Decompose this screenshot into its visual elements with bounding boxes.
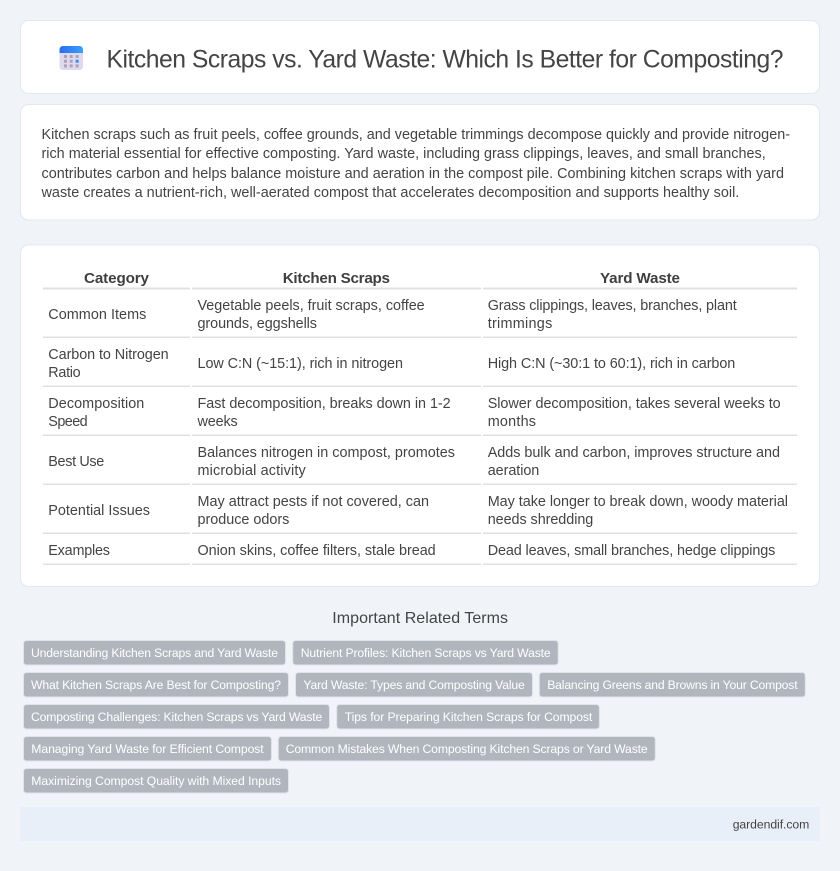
row: decomposition speed: Decomposition: [48, 396, 144, 412]
tag: Nutrient Profiles: Kitchen Scraps vs Yard Waste: [301, 646, 551, 660]
table header row: Yard Waste: [600, 270, 680, 287]
footer bar: [20, 807, 820, 841]
row: best use: Adds bulk and carbon, improves structure and: [488, 445, 780, 461]
row: potential issues: needs shredding: [488, 512, 593, 528]
tag: [278, 736, 655, 761]
tag: [293, 640, 558, 665]
intro paragraph: waste creates a nutrient-rich, well-aerated compost that accelerates decomposition and supports healthy soil.: [40, 185, 739, 201]
row: carbon to nitrogen ratio: Ratio: [48, 365, 81, 381]
row: carbon to nitrogen ratio: [43, 347, 797, 387]
header panel: [20, 20, 820, 94]
tag: Composting Challenges: Kitchen Scraps vs Yard Waste: [31, 710, 323, 724]
row: potential issues: May take longer to break down, woody material: [488, 494, 788, 510]
tag: Maximizing Compost Quality with Mixed Inputs: [31, 774, 281, 788]
row: potential issues: May attract pests if not covered, can: [198, 494, 429, 510]
row: decomposition speed: weeks: [196, 414, 238, 430]
row: decomposition speed: Fast decomposition, breaks down in 1-2: [198, 396, 451, 412]
row: potential issues: Potential Issues: [48, 503, 150, 519]
row: carbon to nitrogen ratio: Carbon to Nitrogen: [48, 347, 169, 363]
tag: Tips for Preparing Kitchen Scraps for Compost: [345, 710, 593, 724]
table header row: Category: [84, 270, 150, 287]
row: decomposition speed: [43, 396, 797, 436]
title: Kitchen Scraps vs. Yard Waste: Which Is Better for Composting?: [106, 46, 784, 74]
intro paragraph: [40, 127, 790, 201]
row: examples: [43, 543, 797, 565]
row: examples: Dead leaves, small branches, hedge clippings: [488, 543, 775, 559]
icon: calendar: [60, 46, 83, 70]
row: carbon to nitrogen ratio: Low C:N (~15:1), rich in nitrogen: [198, 356, 403, 372]
panel: introduction: [20, 104, 820, 220]
row: common items: trimmings: [488, 316, 552, 332]
row: decomposition speed: Speed: [48, 414, 88, 430]
row: carbon to nitrogen ratio: High C:N (~30:1 to 60:1), rich in carbon: [488, 356, 735, 372]
table header row: [43, 270, 797, 290]
tag: [337, 704, 599, 729]
tag: [24, 704, 330, 729]
tag: Common Mistakes When Composting Kitchen Scraps or Yard Waste: [286, 742, 648, 756]
intro paragraph: rich material essential for effective composting. Yard waste, including grass clippings, leaves, and small branches,: [42, 146, 766, 162]
row: best use: aeration: [488, 463, 539, 479]
tag: [24, 672, 288, 697]
table header row: Kitchen Scraps: [283, 270, 390, 287]
tag: Balancing Greens and Browns in Your Compost: [547, 678, 798, 692]
heading: important related terms: Important Related Terms: [332, 610, 508, 627]
intro paragraph: contributes carbon and helps balance moisture and aeration in the compost pile. Combining kitchen scraps with yard: [42, 166, 784, 182]
row: decomposition speed: months: [488, 414, 536, 430]
tag: Understanding Kitchen Scraps and Yard Waste: [31, 646, 278, 660]
row: best use: Balances nitrogen in compost, promotes: [198, 445, 455, 461]
row: decomposition speed: Slower decomposition, takes several weeks to: [488, 396, 781, 412]
row: best use: [43, 445, 797, 485]
footer site name: gardendif.com: [733, 818, 809, 832]
row: common items: Grass clippings, leaves, branches, plant: [488, 298, 737, 314]
intro paragraph: Kitchen scraps such as fruit peels, coffee grounds, and vegetable trimmings decompose quickly and provide nitrogen-: [42, 127, 790, 143]
row: potential issues: [43, 494, 797, 534]
row: common items: [43, 298, 797, 338]
row: best use: microbial activity: [198, 463, 306, 479]
tag: [24, 736, 272, 761]
tag: Yard Waste: Types and Composting Value: [303, 678, 525, 692]
panel: comparison table: [20, 245, 820, 586]
row: best use: Best Use: [48, 454, 104, 470]
panel: related term tags: [24, 640, 805, 793]
tag: [24, 768, 288, 793]
tag: [24, 640, 286, 665]
row: common items: grounds, eggshells: [198, 316, 317, 332]
row: examples: Examples: [48, 543, 110, 559]
row: common items: Vegetable peels, fruit scraps, coffee: [198, 298, 425, 314]
row: examples: Onion skins, coffee filters, stale bread: [198, 543, 436, 559]
row: common items: Common Items: [48, 307, 146, 323]
tag: What Kitchen Scraps Are Best for Composting?: [31, 678, 281, 692]
tag: Managing Yard Waste for Efficient Compost: [31, 742, 264, 756]
tag: [296, 672, 532, 697]
tag: [539, 672, 805, 697]
row: potential issues: produce odors: [198, 512, 289, 528]
